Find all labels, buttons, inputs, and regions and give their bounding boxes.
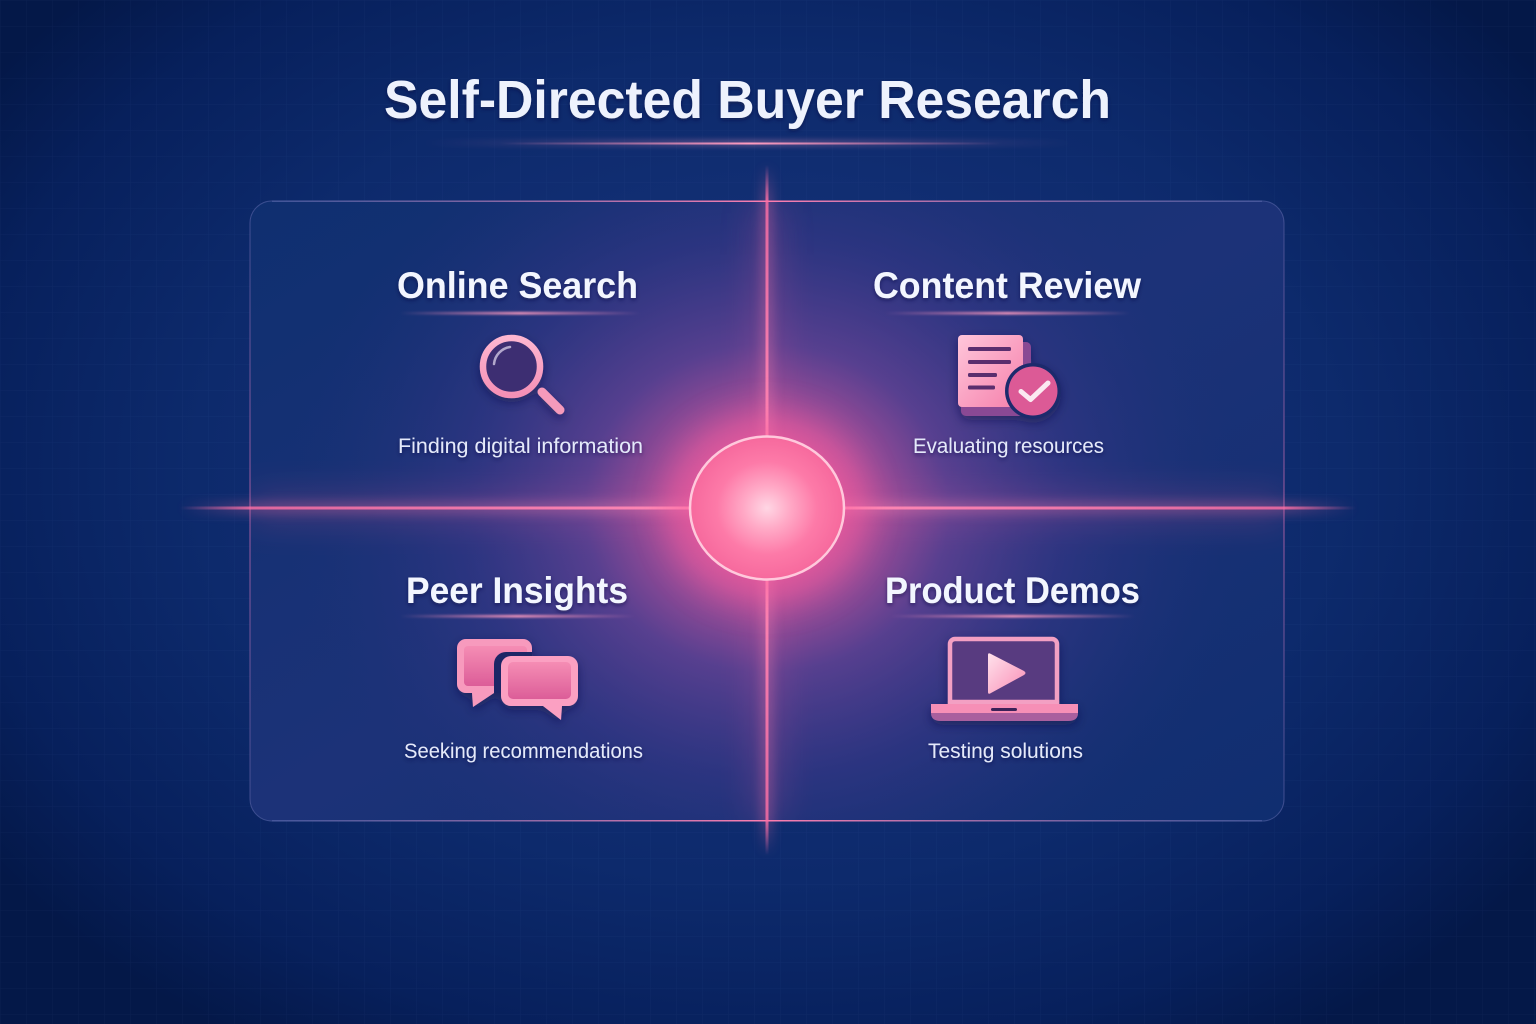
text: Evaluating resources: Evaluating resources xyxy=(913,435,1104,458)
underline: Product Demos xyxy=(890,615,1135,618)
icon: laptop with play button xyxy=(931,639,1078,721)
title underline xyxy=(420,139,1080,147)
central glowing orb xyxy=(669,416,865,600)
heading: Peer Insights: Peer Insights xyxy=(406,570,628,611)
text: Finding digital information: Finding digital information xyxy=(398,435,643,458)
underline: Peer Insights xyxy=(400,615,635,618)
heading: Content Review: Content Review xyxy=(873,265,1141,306)
quadrant: Content Review xyxy=(873,265,1141,458)
panel: quadrant card xyxy=(250,200,1284,822)
heading: Product Demos: Product Demos xyxy=(885,570,1140,611)
cross lines xyxy=(180,165,1356,855)
icon: speech bubbles xyxy=(457,639,578,720)
underline: Online Search xyxy=(400,312,640,314)
underline: Content Review xyxy=(885,312,1130,314)
quadrant: Online Search xyxy=(397,265,643,458)
text: Testing solutions: Testing solutions xyxy=(928,740,1083,763)
icon: document with check badge xyxy=(958,335,1061,419)
icon: magnifying glass xyxy=(483,338,560,410)
heading: Online Search: Online Search xyxy=(397,265,638,306)
title: Self-Directed Buyer Research xyxy=(384,70,1111,130)
quadrant: Peer Insights xyxy=(400,570,643,763)
text: Seeking recommendations: Seeking recommendations xyxy=(404,740,643,763)
quadrant: Product Demos xyxy=(885,570,1140,763)
